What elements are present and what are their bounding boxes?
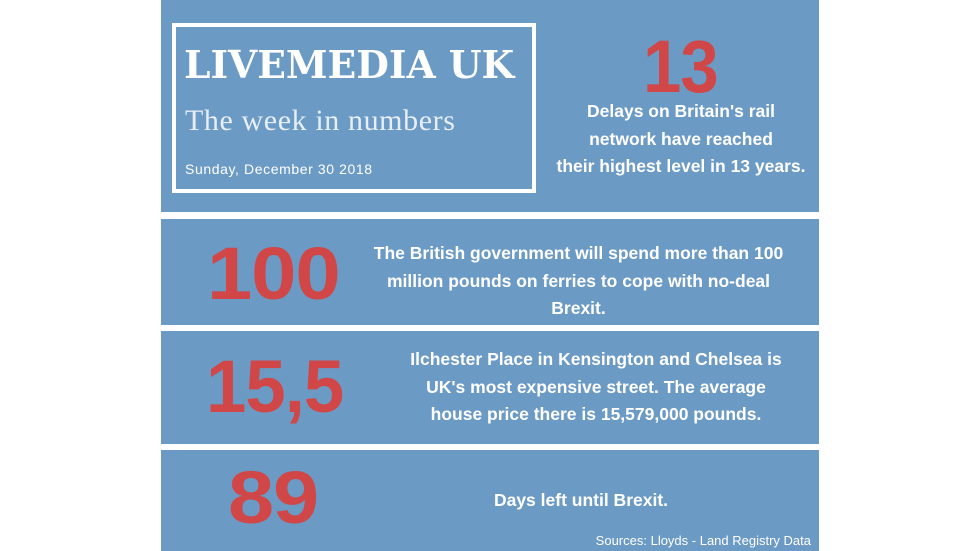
stat text: rail delays: Delays on Britain's rail: [587, 101, 775, 121]
stat text: ferries: million pounds on ferries to cope with no-deal: [387, 270, 770, 290]
stat text: street: house price there is 15,579,000 pounds.: [431, 404, 761, 424]
subtitle: The week in numbers: [185, 104, 456, 137]
stat number: 100: 100: [207, 232, 340, 315]
stat text: street: UK's most expensive street. The average: [426, 376, 766, 396]
stat text: rail delays: network have reached: [589, 128, 773, 148]
stat number: 89: 89: [228, 456, 318, 539]
panel: brexit days: [161, 450, 819, 551]
panel: expensive street: [161, 331, 819, 444]
stat text: ferries: [374, 243, 783, 318]
stat number: 15,5: 15,5: [206, 345, 343, 428]
panel: ferries: [161, 219, 819, 325]
sources: Sources: Lloyds - Land Registry Data: [596, 533, 811, 548]
panel: header: [161, 0, 819, 212]
stat text: street: [410, 349, 782, 424]
stat text: days: Days left until Brexit.: [494, 490, 668, 510]
stat text: rail delays: their highest level in 13 years.: [556, 156, 806, 176]
date: Sunday, December 30 2018: [185, 161, 373, 177]
stat text: rail delays: [556, 101, 806, 176]
stat text: street: Ilchester Place in Kensington and Chelsea is: [410, 349, 782, 369]
stat number: 13: 13: [643, 25, 718, 108]
stat text: ferries: The British government will spend more than 100: [374, 243, 783, 263]
title box: [172, 23, 536, 193]
stat text: ferries: Brexit.: [551, 298, 606, 318]
title: LIVEMEDIA UK: [184, 42, 514, 87]
